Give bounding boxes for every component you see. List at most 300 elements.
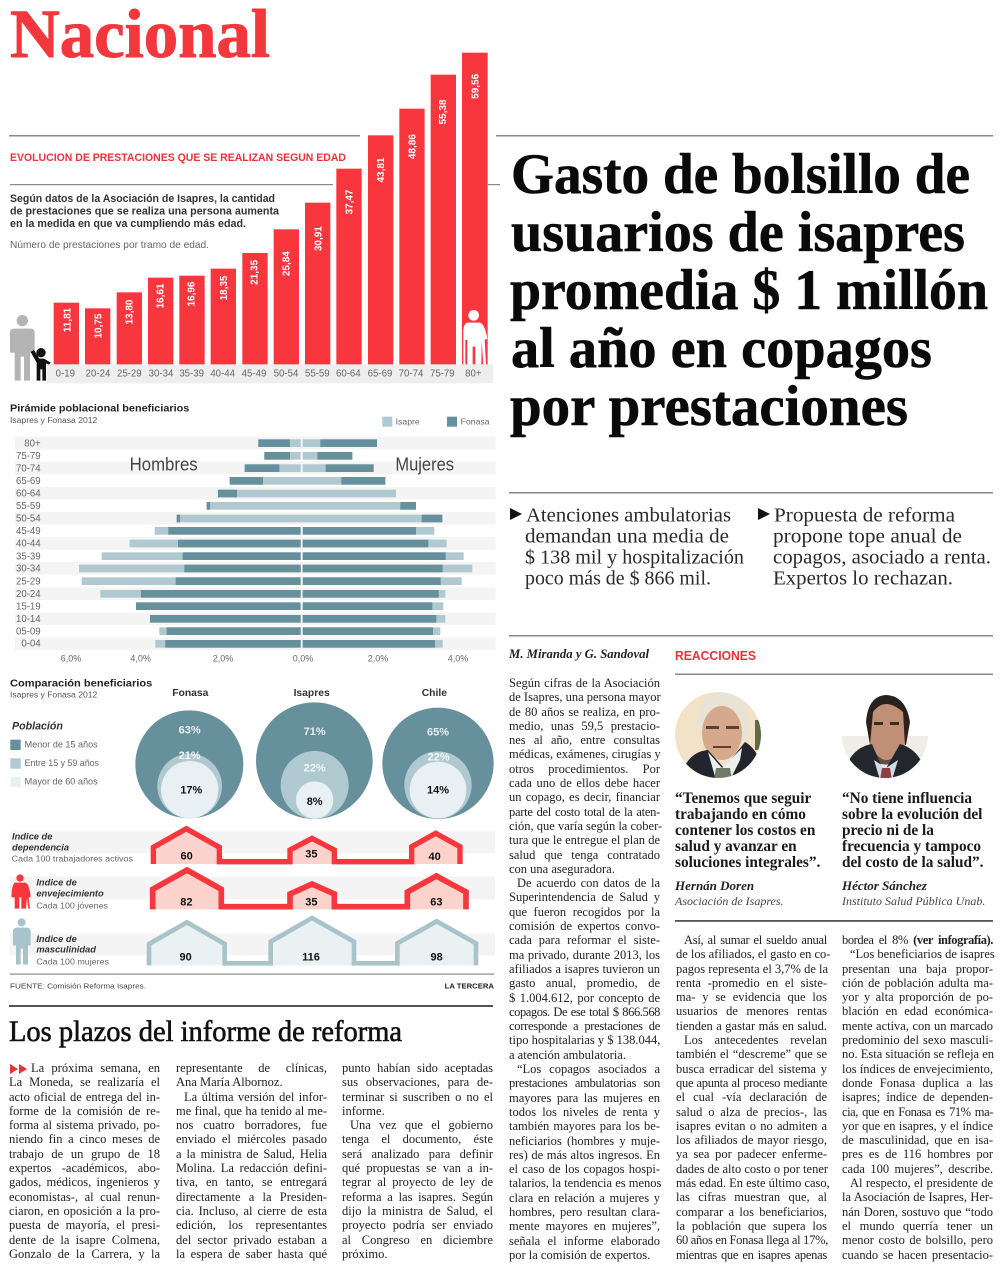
bars and labels: 55-59 [305, 368, 330, 379]
reform article column 2: cia. Incluso, al cierre de esta [176, 1204, 327, 1218]
bars and labels: 75-79 [430, 368, 455, 379]
main article column 3: los índices de envejecimiento, [842, 1062, 993, 1076]
bars and labels [10, 53, 493, 383]
pyramid heading: Pirámide poblacional beneficiarios [10, 404, 190, 415]
circles: Fonasa: 17% [180, 784, 203, 796]
main article column 2: el cual -vía declaración de [676, 1090, 827, 1104]
main article column 2: que apunta al proceso mediante [676, 1076, 827, 1090]
quote: Héctor Sánchez: precio ni de la [842, 822, 934, 839]
main article column 1: ma privado, durante 2013, los [509, 948, 660, 962]
main article column 3: pres es de 116 hombres por [842, 1147, 993, 1161]
row: dependency index [12, 829, 460, 864]
attribution: Hernán Doren: Asociación de Isapres. [675, 894, 784, 908]
reform article column 1: expertos -académicos, abo- [9, 1161, 160, 1175]
bars and labels: 40-44 [210, 368, 236, 379]
legend [382, 416, 490, 427]
column headings: Chile [422, 688, 447, 699]
main article column 1: corresponde a prestaciones de [509, 1019, 660, 1033]
main article column 2: comparar a los beneficiarios, [676, 1205, 827, 1219]
main article column 1: que fueron recogidos por la [509, 905, 660, 919]
main article column 2: también el “descreme” que se [676, 1047, 827, 1061]
reform article column 3: dijo la ministra de Salud, el [342, 1204, 493, 1218]
main article column 1: señala el informe elaborado [509, 1234, 660, 1248]
row: dependency index: 60 [181, 851, 193, 863]
attribution: Héctor Sánchez: Instituto Salud Pública Unab. [842, 894, 985, 908]
bars and labels: 37,47 [344, 189, 355, 214]
main article column 1: a atención ambulatoria. [509, 1048, 626, 1062]
main headline [510, 143, 988, 438]
photo: Hernán Doren [675, 692, 761, 778]
main article column 3: isapres; índice de dependen- [842, 1090, 993, 1104]
quote: Hernán Doren: salud y avanzar en [675, 838, 797, 855]
reform article column 3: próximo. [342, 1247, 387, 1261]
circles: Chile [382, 708, 494, 819]
chart description: Según datos de la Asociación de Isapres, la cantidad [10, 193, 275, 205]
quote: Hernán Doren [675, 790, 820, 871]
reform article column 2: tiva, en tanto, se entregará [176, 1175, 327, 1189]
main article column 3 [842, 933, 995, 1262]
main article column 3: menor costo de bolsillo, pero [842, 1233, 993, 1247]
article heading: Los plazos del informe de reforma: Los plazos del informe de reforma [9, 1015, 402, 1048]
bars and labels: 13,80 [125, 299, 136, 324]
main article column 2: salud o alza de precios-, las [676, 1105, 827, 1119]
main article column 1: el caso de los copagos hospi- [509, 1162, 660, 1176]
main article column 3: nán Doren, sostuvo que “todo [842, 1205, 993, 1219]
icon: elderly person [463, 310, 487, 364]
legend: Isapre [396, 416, 420, 426]
reform article column 3: proyecto podría ser enviado [342, 1218, 493, 1232]
reform article column 1: ciaron, en oposición a la pro- [9, 1204, 160, 1218]
main article column 1: tura que le entregue el plan de [509, 833, 660, 847]
circles: Chile: 65% [427, 727, 449, 739]
main article column 1: “Los copagos asociados a [517, 1062, 660, 1076]
pyramid subheading: Isapres y Fonasa 2012 [10, 415, 98, 425]
bars and labels: 55,38 [438, 99, 449, 124]
circles: Fonasa: 21% [179, 750, 201, 762]
row: masculinity index: masculinidad [36, 945, 96, 955]
bars and labels: 10,75 [94, 313, 105, 338]
row: masculinity index: 90 [180, 951, 192, 963]
main article column 1: tipo hospitalarias y $ 138.044, [509, 1033, 660, 1047]
reform article column 3: sus observaciones, para de- [342, 1075, 493, 1089]
quote: Hernán Doren: trabajando en cómo [675, 806, 806, 823]
column headings: Fonasa [172, 688, 209, 699]
main article column 3: cada 100 mujeres”, describe. [842, 1162, 993, 1176]
row: dependency index: dependencia [12, 842, 69, 852]
reform article column 1: puesta de mayoría, el presi- [9, 1218, 160, 1232]
subhead: ambulatory care: demandan una media de [525, 526, 729, 548]
fonasa bars [136, 439, 446, 648]
age labels [16, 438, 41, 650]
population legend: Menor de 15 años [25, 740, 98, 750]
row: aging index: envejecimiento [36, 888, 104, 898]
main article column 1: Según cifras de la Asociación [509, 676, 660, 690]
circles: Isapres: 22% [304, 762, 326, 774]
reform article column 3 [342, 1061, 493, 1261]
column headings: Isapres [294, 688, 330, 699]
population legend: Mayor de 60 años [25, 776, 98, 786]
age labels: 40-44 [16, 539, 41, 550]
column headings [172, 688, 447, 699]
main article column 3: blación en edad económica- [842, 1004, 993, 1018]
reform article column 1: dente de la isapre Colmena, [9, 1233, 160, 1247]
main article column 2: isapres evitan o no admiten a [676, 1119, 827, 1133]
bars and labels: 16,61 [155, 283, 166, 308]
x axis labels: 4,0% [448, 654, 468, 664]
bars and labels: 25,84 [282, 251, 293, 276]
reform article column 1: acto oficial de entrega del in- [9, 1090, 160, 1104]
population legend: Entre 15 y 59 años [25, 758, 99, 768]
panel: bar chart of prestaciones by age [10, 53, 493, 383]
reform article column 3: informe. [342, 1104, 385, 1118]
reform article column 2: me final, que ha tenido al me- [176, 1104, 327, 1118]
circles: Isapres: 71% [304, 726, 326, 738]
row: aging index: 35 [305, 896, 317, 908]
main article column 3: cuando se hacen presentacio- [842, 1248, 993, 1262]
age labels: 25-29 [16, 576, 41, 587]
main article column 2: mientras que en isapres apenas [676, 1248, 827, 1262]
row bands [15, 437, 496, 650]
main article column 3: bordea el 8% (ver infografía). [842, 933, 993, 947]
bars and labels: 20-24 [86, 368, 111, 379]
circles: Chile: 22% [428, 751, 450, 763]
x axis labels: 2,0% [213, 654, 233, 664]
row: aging index: Indice de [36, 877, 77, 887]
main article column 1: res) de más altos ingresos. En [509, 1148, 660, 1162]
population legend: Población [12, 720, 63, 732]
age labels: 50-54 [16, 514, 41, 525]
attribution: Héctor Sánchez: Héctor Sánchez [842, 878, 927, 893]
quote: Hernán Doren: “Tenemos que seguir [675, 790, 811, 807]
reactions heading: REACCIONES [675, 648, 756, 663]
reform article column 1: La Moneda, se realizaría el [9, 1075, 160, 1089]
main article column 1: por la comisión de expertos. [509, 1248, 650, 1262]
chart heading: EVOLUCION DE PRESTACIONES QUE SE REALIZAN SEGUN EDAD [10, 152, 346, 164]
gender labels: Mujeres [395, 453, 454, 474]
main article column 2: pagos representa el 3,7% de la [676, 962, 828, 976]
subhead: reform proposal: Expertos lo rechazan. [773, 568, 953, 590]
age labels: 65-69 [16, 476, 41, 487]
age labels: 10-14 [16, 614, 41, 625]
main article column 1: parte del costo total de la aten- [509, 805, 660, 819]
population legend [10, 720, 99, 787]
panel: population pyramid [10, 404, 496, 664]
main article column 2: las cifras muestran que, al [676, 1190, 827, 1204]
main article column 1: salud que tenga contratado [509, 848, 660, 862]
icon: red double arrow [10, 1064, 27, 1074]
main article column 3: yor que en isapres, y el índice [842, 1119, 993, 1133]
main article column 1: cada uno de ellos debe hacer [509, 776, 660, 790]
reform article column 2: a la ministra de Salud, Helia [176, 1147, 327, 1161]
reform article column 3: reforma a las isapres. Según [342, 1190, 493, 1204]
icon: child [31, 348, 51, 381]
x axis labels: 6,0% [61, 654, 81, 664]
reform article column 2: Molina. La redacción defini- [176, 1161, 327, 1175]
legend: Fonasa [461, 416, 490, 426]
attribution: Héctor Sánchez [842, 878, 985, 908]
main article column 2: la población que supera los [676, 1219, 827, 1233]
age labels: 15-19 [16, 602, 41, 613]
row: dependency index: Cada 100 trabajadores activos [12, 853, 133, 863]
main article column 1: $ 1.004.612, por concepto de [509, 991, 660, 1005]
chart description: en la medida en que va cumpliendo más edad. [10, 218, 246, 230]
reform article column 1: La próxima semana, en [31, 1061, 160, 1075]
quote: Héctor Sánchez: del costo de la salud”. [842, 854, 984, 871]
main article column 2: más edad. En este último caso, [676, 1176, 830, 1190]
main headline: Gasto de bolsillo de [511, 143, 970, 206]
row: aging index [11, 870, 466, 911]
main article column 1: afiliados a isapres tuvieron un [509, 962, 660, 976]
age labels: 70-74 [16, 464, 41, 475]
reform article column 3: tegrar al proyecto de ley de [342, 1175, 493, 1189]
reform article column 1: forme de la comisión de re- [9, 1104, 160, 1118]
main article column 1: nes al año, entre consultas [509, 733, 660, 747]
bars and labels: 30-34 [149, 368, 174, 379]
main article column 1: médicas, exámenes, cirugías y [509, 747, 661, 761]
quote: Héctor Sánchez: sobre la evolución del [842, 806, 982, 823]
bars and labels: 43,81 [376, 157, 387, 182]
comparison subheading: Isapres y Fonasa 2012 [10, 689, 98, 699]
subhead: ambulatory care: $ 138 mil y hospitalización [525, 548, 744, 568]
icon: blue person [13, 918, 31, 965]
main article column 3: de masculinidad, que en isa- [842, 1133, 993, 1147]
main article column 3: ción de población adulta ma- [842, 976, 993, 990]
reform article column 2 [176, 1061, 327, 1261]
credit: LA TERCERA [445, 982, 494, 991]
reform article column 3: terminar si suscriben o no el [342, 1090, 493, 1104]
panel: beneficiaries comparison [10, 678, 495, 991]
reform article column 2: nos cuatro borradores, fue [176, 1118, 327, 1132]
icon: red elderly person [11, 874, 31, 909]
age labels: 55-59 [16, 501, 41, 512]
main article column 1: gasto anual, promedio, de [509, 976, 660, 990]
main article column 3: mente activa, con un marcado [842, 1019, 993, 1033]
age labels: 75-79 [16, 451, 41, 462]
main article column 3: cia, que en Fonasa es 71% ma- [842, 1105, 993, 1119]
reform article column 2: Ana María Albornoz. [176, 1075, 283, 1089]
bars and labels: 70-74 [399, 368, 424, 379]
main article column 1: también mayores para los be- [509, 1119, 660, 1133]
reform article column 1 [9, 1061, 160, 1261]
subhead: ambulatory care: poco más de $ 866 mil. [525, 568, 711, 590]
bars and labels: 50-54 [274, 368, 299, 379]
reform article column 1: forma al sistema privado, po- [9, 1118, 160, 1132]
main article column 1: de Isapres, una persona mayor [509, 690, 661, 704]
reform article column 3: Una vez que el gobierno [350, 1118, 493, 1132]
main article column 2 [676, 933, 830, 1262]
reform article column 2: directamente a la Presiden- [176, 1190, 327, 1204]
quote: Héctor Sánchez: “No tiene influencia [842, 790, 972, 807]
main article column 1: un copago, es decir, financiar [509, 790, 660, 804]
main article column 1: neficiarios (hombres y muje- [509, 1134, 660, 1148]
main article column 3: predominio del sexo masculi- [842, 1033, 993, 1047]
bars and labels: 60-64 [336, 368, 361, 379]
main headline: por prestaciones [510, 375, 908, 438]
main article column 3: Al respecto, el presidente de [850, 1176, 993, 1190]
main headline: al año en copagos [511, 317, 932, 380]
bars and labels: 21,35 [250, 259, 261, 285]
age labels: 35-39 [16, 551, 41, 562]
reform article column 2: edición, los representantes [176, 1218, 327, 1232]
reform article column 3: tenga el documento, éste [342, 1132, 493, 1146]
reform article column 2: La última versión del infor- [184, 1090, 327, 1104]
row: masculinity index: Cada 100 mujeres [36, 957, 109, 967]
row: masculinity index: 98 [431, 951, 443, 963]
main article column 2: 60 años en Fonasa llega al 17%, [676, 1233, 828, 1247]
age labels: 05-09 [16, 627, 41, 638]
main article column 2: los afiliados de mayor riesgo, [676, 1133, 827, 1147]
age labels: 20-24 [16, 589, 41, 600]
subhead: reform proposal: propone tope anual de [773, 526, 962, 548]
main article column 3: presentan una baja propor- [842, 962, 993, 976]
bars and labels: 25-29 [117, 368, 142, 379]
main article column 1: prestaciones ambulatorias son [509, 1076, 660, 1090]
main article column 1: medio, unas 59,5 prestacio- [509, 719, 660, 733]
subhead: ambulatory care: Atenciones ambulatorias [526, 506, 731, 526]
main article column 1 [509, 676, 662, 1262]
main article column 1: mente mayores en mujeres”, [509, 1219, 660, 1233]
reform article column 3: al Congreso en diciembre [342, 1233, 493, 1247]
reform article column 3: qué propuestas se van a in- [342, 1161, 493, 1175]
main article column 1: comisión de expertos convo- [509, 919, 660, 933]
row: masculinity index: Indice de [36, 934, 77, 944]
row: dependency index: 40 [429, 851, 441, 863]
subhead: ambulatory care [510, 506, 744, 590]
main article column 1: de 80 años se realiza, en pro- [509, 705, 660, 719]
circles: Isapres: 8% [307, 796, 323, 808]
attribution: Hernán Doren: Hernán Doren [675, 878, 754, 893]
reform article column 1: niendo fin a cinco meses de [9, 1132, 160, 1146]
bars and labels: 18,35 [219, 275, 230, 300]
main article column 2: Así, al sumar el sueldo anual [684, 933, 827, 947]
bars and labels: 48,86 [408, 134, 419, 159]
main article column 1: ción, que varía según la cober- [509, 819, 662, 833]
x axis labels: 2,0% [368, 654, 388, 664]
reform article column 2: representante de clínicas, [176, 1061, 327, 1075]
icon: adult [10, 315, 35, 381]
reform article column 1: gados, médicos, ingenieros y [9, 1175, 160, 1189]
bars and labels: 30,91 [314, 226, 325, 251]
photo: Héctor Sánchez [842, 692, 928, 780]
reform article column 2: enviado el miércoles pasado [176, 1132, 327, 1146]
main article column 1: otros procedimientos. Por [509, 762, 660, 776]
main article column 1: todos los niveles de renta y [509, 1105, 660, 1119]
byline: M. Miranda y G. Sandoval [508, 646, 649, 661]
age labels: 80+ [24, 438, 41, 449]
reform article column 1: trabajo de un grupo de 18 [9, 1147, 160, 1161]
reform article column 1: economistas-, al cual renun- [9, 1190, 160, 1204]
circles: Isapres [256, 702, 373, 819]
main article column 1: Superintendencia de Salud y [509, 890, 660, 904]
circles: Fonasa: 63% [179, 725, 201, 737]
reform article column 2: la espera de saber hasta qué [176, 1247, 327, 1261]
row: aging index: 63 [430, 896, 442, 908]
quote: Héctor Sánchez [842, 790, 984, 871]
main article column 3: el mundo querría tener un [842, 1219, 993, 1233]
circles: Fonasa [135, 710, 243, 818]
main article column 2: de los afiliados, el gasto en co- [676, 947, 830, 961]
reform article column 3: será analizado para definir [342, 1147, 493, 1161]
main headline: promedia $ 1 millón [510, 259, 988, 322]
isapre bars [79, 439, 472, 648]
age labels: 45-49 [16, 526, 41, 537]
row: masculinity index [13, 918, 476, 967]
main article column 1: mayores para las mujeres en [509, 1091, 660, 1105]
bars and labels: 65-69 [368, 368, 392, 379]
bars and labels: 0-19 [56, 368, 75, 379]
circles: Chile: 14% [427, 784, 449, 796]
age labels: 60-64 [16, 489, 41, 500]
bars and labels: 16,96 [187, 281, 198, 306]
main article column 2: Los antecedentes revelan [684, 1033, 827, 1047]
subhead: reform proposal [758, 506, 991, 590]
gender labels: Hombres [130, 453, 198, 474]
main article column 1: talarios, la tendencia es menos [509, 1176, 661, 1190]
quote: Héctor Sánchez: frecuencia y tampoco [842, 838, 981, 855]
main article column 1: copagos. De ese total $ 866.568 [509, 1005, 660, 1019]
age labels: 30-34 [16, 564, 41, 575]
chart description [10, 193, 280, 230]
main article column 2: tienden a gastar más en salud. [676, 1019, 827, 1033]
reform article column 1: Gonzalo de la Carrera, y la [9, 1247, 160, 1261]
main article column 3: donde Fonasa duplica a las [842, 1076, 993, 1090]
chart unit note: Número de prestaciones por tramo de edad. [10, 239, 209, 251]
attribution: Hernán Doren [674, 878, 784, 908]
main article column 2: usuarios de menores rentas [676, 1004, 827, 1018]
main article column 3: “Los beneficiarios de isapres [850, 947, 995, 961]
main article column 2: busca erradicar del sistema y [676, 1062, 827, 1076]
quote: Hernán Doren: contener los costos en [675, 822, 815, 839]
gender labels [130, 453, 454, 474]
main article column 2: ma- y se evidencia que los [676, 990, 827, 1004]
age labels: 0-04 [21, 639, 41, 650]
bars and labels: 11,81 [62, 307, 73, 332]
main article column 1: De acuerdo con datos de la [517, 876, 660, 890]
main article column 1: hombres, pero resultan clara- [509, 1205, 660, 1219]
main article column 3: no. Esta situación se refleja en [842, 1047, 994, 1061]
row: aging index: 82 [180, 896, 192, 908]
source line: FUENTE: Comisión Reforma Isapres. [10, 982, 146, 991]
row: dependency index: Indice de [12, 831, 52, 841]
bars and labels: 59,56 [471, 73, 482, 99]
row: masculinity index: 116 [302, 951, 320, 963]
main article column 1: cada para reformar el siste- [509, 933, 660, 947]
subhead: reform proposal: Propuesta de reforma [774, 506, 955, 526]
main article column 3: yor y alta proporción de po- [842, 990, 993, 1004]
main headline: usuarios de isapres [511, 201, 965, 264]
main article column 1: con una aseguradora. [509, 862, 615, 876]
main article column 2: ya sea por padecer enferme- [676, 1147, 827, 1161]
chart description: de prestaciones que se realiza una persona aumenta [10, 206, 280, 218]
x axis labels [61, 654, 468, 664]
reform article column 3: punto habían sido aceptadas [342, 1061, 493, 1075]
comparison heading: Comparación beneficiarios [10, 678, 153, 689]
main article column 3: la Asociación de Isapres, Her- [842, 1190, 993, 1204]
main article column 2: dades de alto costo o por tener [676, 1162, 828, 1176]
bars and labels: 45-49 [242, 368, 266, 379]
quote: Hernán Doren: soluciones integrales”. [675, 854, 820, 871]
main article column 2: renta -promedio en el siste- [676, 976, 827, 990]
bars and labels: 80+ [465, 368, 482, 379]
row: aging index: Cada 100 jóvenes [36, 901, 108, 911]
bars and labels: 35-39 [179, 368, 204, 379]
reform article column 2: del sector privado estaban a [176, 1233, 327, 1247]
main article column 1: clara en relación a mujeres y [509, 1191, 660, 1205]
subhead: reform proposal: copagos, asociado a renta. [773, 548, 991, 568]
x axis labels: 0,0% [293, 654, 313, 664]
row: dependency index: 35 [305, 849, 317, 861]
x axis labels: 4,0% [130, 654, 151, 664]
